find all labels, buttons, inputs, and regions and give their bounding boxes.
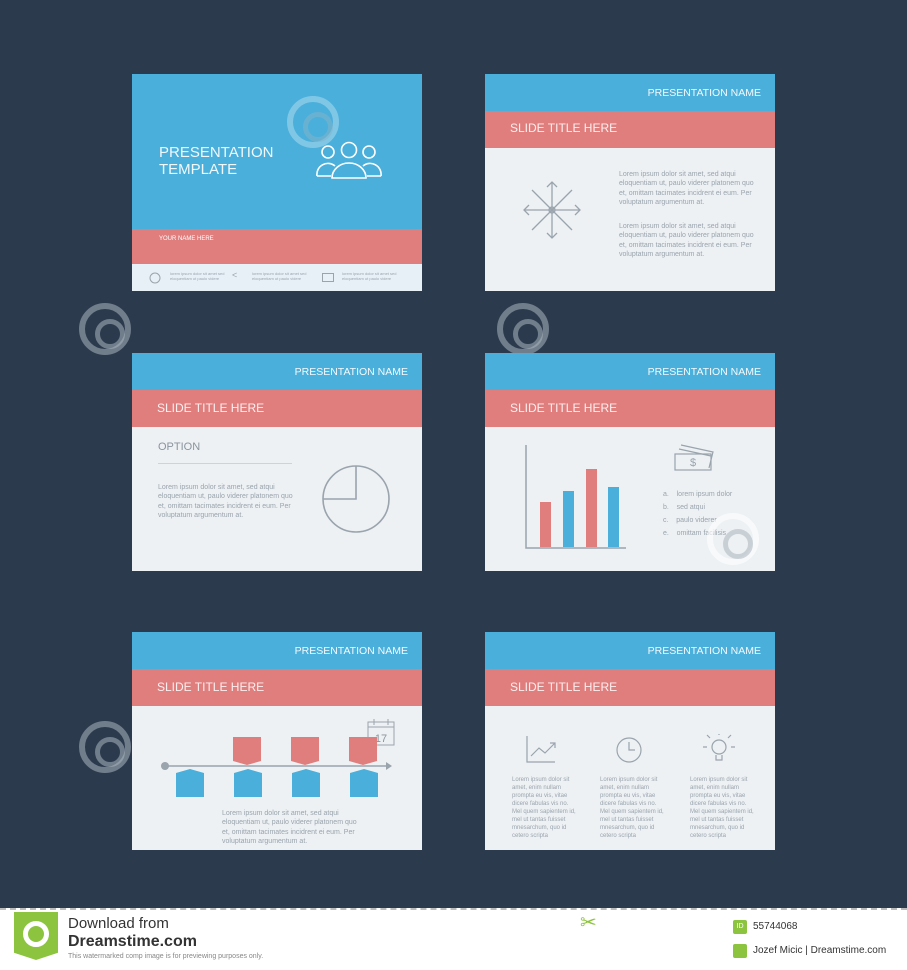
slide 2: directions	[485, 74, 775, 291]
slide 4: bar chart: SLIDE TITLE HERE	[510, 401, 617, 415]
slide 6: three columns: Lorem ipsum dolor sit	[600, 777, 657, 783]
slide 3: option pie	[132, 353, 422, 571]
footer: dreamstime: Dreamstime.com	[68, 933, 197, 950]
slide 6: three columns: cetero scripta	[690, 833, 726, 839]
footer contacts: lorem ipsum dolor sit amet sed	[342, 271, 396, 276]
slide 2: directions: voluptatum argumentum at.	[619, 251, 704, 258]
icon: arrows	[523, 181, 581, 239]
icon: calendar: 17	[375, 733, 387, 745]
pie chart	[322, 465, 390, 533]
slide 6: three columns: amet, enim nullam	[600, 785, 649, 791]
footer: dreamstime: 55744068	[753, 921, 798, 932]
text: et, omittam tacimates incidrent ei eum. Per	[158, 503, 291, 510]
icon: people	[316, 142, 382, 179]
footer: dreamstime: Jozef Micic | Dreamstime.com	[753, 945, 886, 956]
slide 6: three columns	[485, 632, 775, 850]
slide 1: title slide	[132, 74, 422, 291]
slide 6: three columns: PRESENTATION NAME	[648, 645, 761, 657]
id	[733, 920, 747, 934]
slide 2: directions: PRESENTATION NAME	[648, 87, 761, 99]
slide 6: three columns: Lorem ipsum dolor sit	[690, 777, 747, 783]
slide 6: three columns: mel ut tantas fuisset	[690, 817, 743, 823]
slide 6: three columns: prompta eu vis, vitae	[600, 793, 655, 799]
columns text	[512, 776, 576, 839]
icon: money: $	[690, 457, 696, 469]
icon: calendar	[368, 719, 394, 746]
slide 6: three columns: amet, enim nullam	[690, 785, 739, 791]
text: eloquentiam ut, paulo viderer platonem quo	[158, 493, 293, 500]
text paragraphs	[619, 170, 754, 206]
slide 4: bar chart: PRESENTATION NAME	[648, 366, 761, 378]
title text: TEMPLATE	[159, 161, 237, 178]
slide 6: three columns: SLIDE TITLE HERE	[510, 680, 617, 694]
scissors: ✂	[580, 912, 597, 934]
text: et, omittam tacimates incidrent ei eum. Per	[222, 829, 355, 836]
footer contacts: <	[232, 270, 237, 280]
columns text: mel ut tantas fuisset	[512, 817, 565, 823]
columns text: mnesarchum, quo id	[512, 825, 566, 831]
slide 3: option pie: SLIDE TITLE HERE	[157, 401, 264, 415]
name bar	[132, 229, 422, 264]
watermark swirls	[79, 303, 131, 355]
text paragraphs: eloquentiam ut, paulo viderer platonem quo	[619, 180, 754, 187]
text paragraphs: et, omittam tacimates incidrent ei eum. Per	[619, 190, 752, 197]
text: eloquentiam ut, paulo viderer platonem quo	[222, 819, 357, 826]
name bar: YOUR NAME HERE	[159, 236, 214, 242]
timeline	[161, 737, 392, 797]
footer contacts: lorem ipsum dolor sit amet sed	[252, 271, 306, 276]
icons	[526, 734, 735, 763]
slide 2: directions: Lorem ipsum dolor sit amet, sed atqui	[619, 223, 736, 230]
slide 2: directions: et, omittam tacimates incidrent ei eum. Per	[619, 242, 752, 249]
watermark	[707, 513, 759, 565]
heading: option: OPTION	[158, 441, 200, 453]
slide 6: three columns: cetero scripta	[600, 833, 636, 839]
badge	[14, 912, 58, 960]
slide 6: three columns: mel ut tantas fuisset	[600, 817, 653, 823]
slide 2: directions: SLIDE TITLE HERE	[510, 121, 617, 135]
text: voluptatum argumentum at.	[222, 838, 307, 845]
text	[158, 484, 293, 519]
id: ID	[736, 923, 744, 930]
list	[663, 490, 732, 537]
footer contacts	[132, 264, 422, 291]
slide 6: three columns: dicere fabulas vis no.	[690, 801, 746, 807]
footer contacts: eloquentiam ut paulo videre	[170, 276, 219, 281]
slide 5: timeline: SLIDE TITLE HERE	[157, 680, 264, 694]
slide 5: timeline	[132, 632, 422, 850]
footer: dreamstime: This watermarked comp image is for previewing purposes only.	[68, 953, 263, 960]
list: c. paulo viderer	[663, 517, 717, 524]
list: e. omittam facilisis	[663, 530, 726, 537]
slide 4: bar chart	[485, 353, 775, 571]
slide 6: three columns: prompta eu vis, vitae	[690, 793, 745, 799]
slide 6: three columns: mnesarchum, quo id	[600, 825, 654, 831]
columns text: prompta eu vis, vitae	[512, 793, 567, 799]
footer: dreamstime	[0, 908, 907, 970]
title text: PRESENTATION	[159, 144, 273, 161]
footer contacts: lorem ipsum dolor sit amet sed	[170, 271, 224, 276]
text: voluptatum argumentum at.	[158, 512, 243, 519]
slide 2: directions: eloquentiam ut, paulo viderer platonem quo	[619, 232, 754, 239]
slide 5: timeline: PRESENTATION NAME	[295, 645, 408, 657]
list: a. lorem ipsum dolor	[663, 491, 732, 498]
watermark	[287, 96, 339, 148]
columns text: amet, enim nullam	[512, 785, 561, 791]
columns text: Lorem ipsum dolor sit	[512, 777, 569, 783]
slide 3: option pie: PRESENTATION NAME	[295, 366, 408, 378]
text: Lorem ipsum dolor sit amet, sed atqui	[222, 810, 339, 817]
slide 6: three columns: Mel quem sapientem id,	[690, 809, 754, 815]
title text	[159, 144, 273, 178]
footer contacts: eloquentiam ut paulo videre	[252, 276, 301, 281]
list: b. sed atqui	[663, 504, 705, 511]
footer: dreamstime: Download from	[68, 915, 169, 932]
columns text: dicere fabulas vis no.	[512, 801, 568, 807]
bar chart	[525, 445, 626, 549]
text: Lorem ipsum dolor sit amet, sed atqui	[158, 484, 275, 491]
slide 6: three columns: Mel quem sapientem id,	[600, 809, 664, 815]
columns text: Mel quem sapientem id,	[512, 809, 576, 815]
columns text: cetero scripta	[512, 833, 548, 839]
slide 6: three columns: dicere fabulas vis no.	[600, 801, 656, 807]
text	[222, 810, 357, 845]
footer contacts: eloquentiam ut paulo videre	[342, 276, 391, 281]
text paragraphs: Lorem ipsum dolor sit amet, sed atqui	[619, 171, 736, 178]
icon: money	[674, 444, 714, 471]
slide 6: three columns: mnesarchum, quo id	[690, 825, 744, 831]
text paragraphs: voluptatum argumentum at.	[619, 199, 704, 206]
